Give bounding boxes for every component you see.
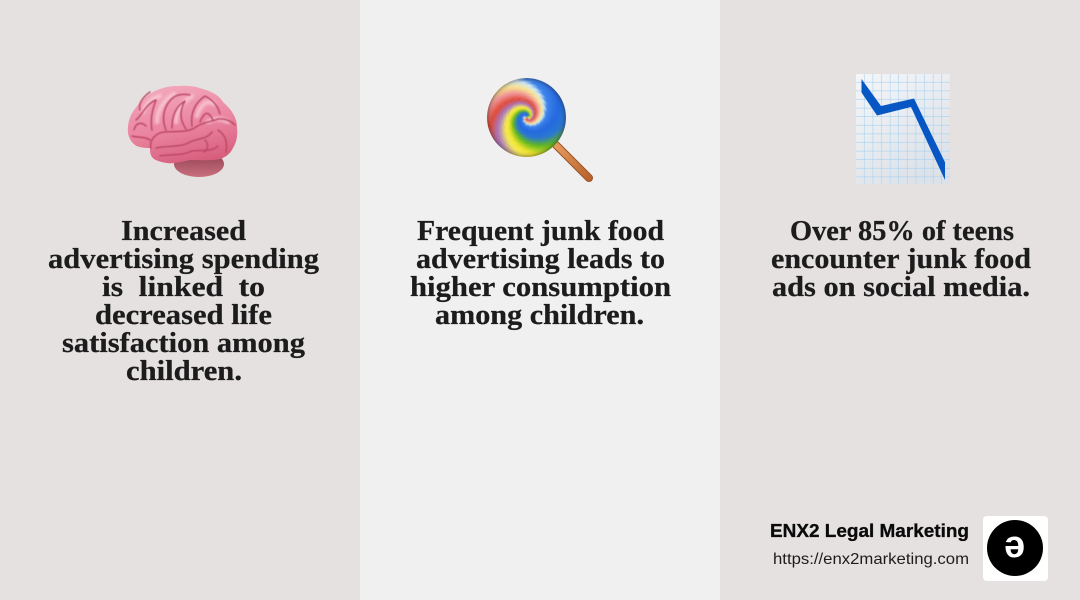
heading: advertising spending: decreased life bbox=[95, 299, 272, 331]
heading: advertising spending: advertising spending bbox=[48, 243, 320, 275]
heading: advertising spending: satisfaction among bbox=[62, 327, 306, 359]
heading: social media exposure: encounter junk food bbox=[771, 243, 1031, 275]
icon: brain bbox=[128, 86, 237, 177]
heading: advertising frequency: advertising leads to bbox=[416, 243, 665, 275]
heading: advertising frequency bbox=[410, 215, 671, 331]
heading: advertising spending: Increased bbox=[121, 215, 246, 247]
heading: advertising spending: is linked to bbox=[102, 271, 265, 303]
brand url: https://enx2marketing.com bbox=[773, 551, 969, 568]
icon: falling chart bbox=[856, 74, 950, 184]
heading: advertising frequency: among children. bbox=[435, 299, 644, 331]
heading: social media exposure: Over 85% of teens bbox=[790, 215, 1014, 247]
heading: advertising frequency: higher consumption bbox=[410, 271, 671, 303]
icon: lollipop bbox=[487, 78, 593, 182]
panel: advertising spending bbox=[0, 0, 360, 600]
heading: social media exposure: ads on social media. bbox=[772, 271, 1030, 303]
heading: advertising spending bbox=[48, 215, 320, 387]
logo bbox=[983, 516, 1048, 581]
heading: advertising spending: children. bbox=[126, 355, 242, 387]
brand name: ENX2 Legal Marketing bbox=[770, 520, 969, 541]
logo: ə bbox=[1004, 524, 1025, 566]
heading: social media exposure bbox=[771, 215, 1031, 303]
panel: advertising frequency bbox=[360, 0, 720, 600]
panel: social media exposure bbox=[720, 0, 1080, 600]
heading: advertising frequency: Frequent junk food bbox=[417, 215, 664, 247]
